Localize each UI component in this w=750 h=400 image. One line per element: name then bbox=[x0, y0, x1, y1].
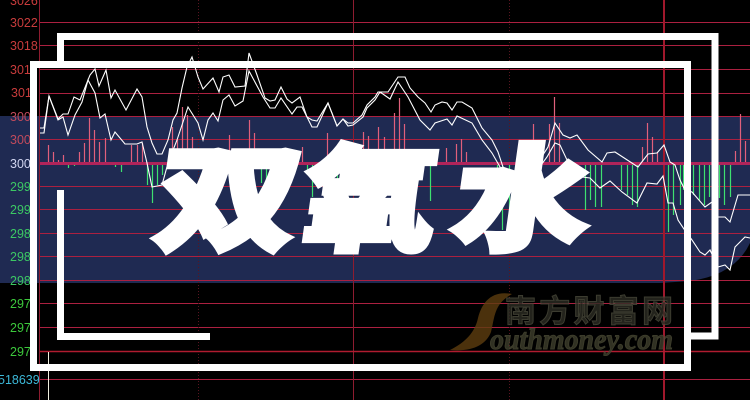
title bbox=[147, 108, 604, 275]
watermark: Southmoney bbox=[450, 293, 673, 356]
price axis labels: 298 bbox=[10, 250, 31, 264]
title glyph 2: 氧 bbox=[293, 108, 451, 275]
title glyph 1: 双 bbox=[147, 108, 313, 275]
price axis labels: 301 bbox=[11, 86, 32, 100]
volume tick below frame bbox=[48, 352, 50, 400]
price axis labels: 297 bbox=[10, 321, 31, 335]
price axis labels: 3018 bbox=[10, 39, 38, 53]
price axis labels: 299 bbox=[10, 203, 31, 217]
watermark S emblem bbox=[450, 293, 512, 350]
price axis labels: 301 bbox=[10, 63, 31, 77]
volume bars: falling bbox=[68, 163, 730, 232]
blue highlight band bbox=[0, 116, 750, 283]
price line lower bbox=[40, 71, 750, 270]
price axis labels: 299 bbox=[10, 180, 31, 194]
outer broken white frame bbox=[60, 36, 715, 336]
price line upper bbox=[40, 53, 750, 222]
price axis labels: 297 bbox=[10, 297, 31, 311]
price axis labels: 300 bbox=[10, 133, 31, 147]
watermark domain: outhmoney.com bbox=[490, 323, 673, 356]
centre baseline bbox=[40, 162, 750, 165]
price axis labels: 298 bbox=[10, 227, 31, 241]
title glyph 3: 水 bbox=[444, 108, 604, 275]
price axis labels: 300 bbox=[10, 110, 31, 124]
price axis labels: 297 bbox=[10, 345, 31, 359]
price axis labels: 3022 bbox=[10, 16, 38, 30]
price axis labels: 298 bbox=[10, 274, 31, 288]
price axis labels bbox=[0, 0, 40, 387]
watermark chinese name: 南方财富网 bbox=[505, 294, 673, 329]
inner white frame bbox=[34, 64, 688, 368]
price axis labels: 300 bbox=[10, 157, 31, 171]
volume bars: rising bbox=[48, 97, 746, 163]
